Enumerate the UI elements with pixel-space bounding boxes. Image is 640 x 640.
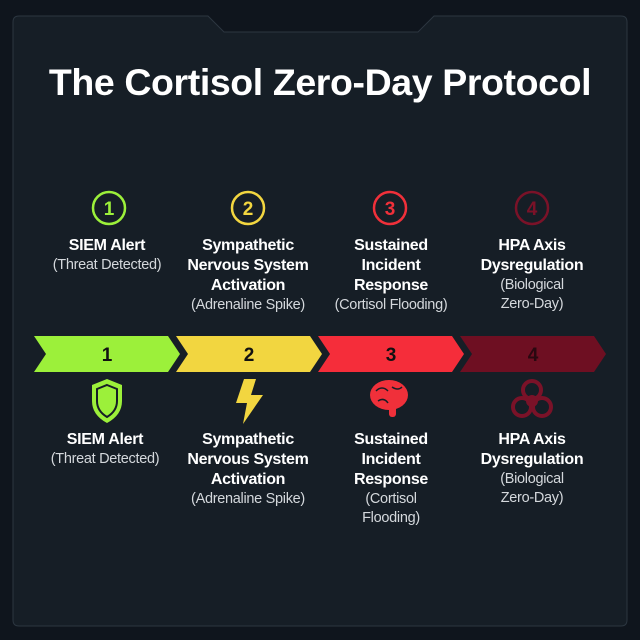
circle 1: 1 xyxy=(104,199,115,220)
lower label 4: Dysregulation xyxy=(481,451,583,468)
lower label 2: Nervous System xyxy=(187,451,309,468)
lower label 3: Flooding) xyxy=(362,510,420,526)
upper label 2: Sympathetic xyxy=(202,237,294,254)
icon: biohazard xyxy=(513,381,551,416)
icon: lightning xyxy=(236,379,263,424)
upper label 3: Incident xyxy=(362,257,420,274)
lower label 1 xyxy=(51,431,159,467)
icon: shield xyxy=(92,379,122,423)
circle 3 xyxy=(374,192,406,224)
upper label 2 xyxy=(187,237,309,313)
lower label 3: (Cortisol xyxy=(365,491,417,507)
icon: brain xyxy=(370,380,408,417)
icons xyxy=(92,379,553,424)
lower label 4: Zero-Day) xyxy=(501,490,563,506)
upper label 4: Zero-Day) xyxy=(501,296,563,312)
upper label 3 xyxy=(335,237,447,313)
lower label 2: Activation xyxy=(211,471,285,488)
circle 1 xyxy=(93,192,125,224)
chevron 2: 2 xyxy=(244,345,254,366)
lower label 1: (Threat Detected) xyxy=(51,451,159,467)
lower label 3: Sustained xyxy=(354,431,428,448)
lower label 2: Sympathetic xyxy=(202,431,294,448)
upper label 2: (Adrenaline Spike) xyxy=(191,297,305,313)
lower label 3: Response xyxy=(354,471,428,488)
chevron 2 xyxy=(176,336,322,372)
chevron 3 xyxy=(318,336,464,372)
upper label 1 xyxy=(53,237,161,273)
upper label 2: Activation xyxy=(211,277,285,294)
title: The Cortisol Zero-Day Protocol xyxy=(49,61,591,103)
upper label 4 xyxy=(481,237,583,312)
upper label 4: Dysregulation xyxy=(481,257,583,274)
lower label 4: HPA Axis xyxy=(498,431,566,448)
lower label 1: SIEM Alert xyxy=(67,431,143,448)
chevron 4: 4 xyxy=(528,345,539,366)
lower label 4: (Biological xyxy=(500,471,564,487)
lower label 2 xyxy=(187,431,309,507)
lower label 4 xyxy=(481,431,583,506)
lower label 3 xyxy=(354,431,428,526)
chevron 1: 1 xyxy=(102,345,113,366)
upper label 2: Nervous System xyxy=(187,257,309,274)
upper label 1: SIEM Alert xyxy=(69,237,145,254)
lower label 2: (Adrenaline Spike) xyxy=(191,491,305,507)
circle 4 xyxy=(516,192,548,224)
circle 3: 3 xyxy=(385,199,395,220)
lower label 3: Incident xyxy=(362,451,420,468)
upper label 3: (Cortisol Flooding) xyxy=(335,297,447,313)
circle 4: 4 xyxy=(527,199,538,220)
upper label 1: (Threat Detected) xyxy=(53,257,161,273)
chevron bar xyxy=(34,336,606,372)
upper label 4: HPA Axis xyxy=(498,237,566,254)
upper label 4: (Biological xyxy=(500,277,564,293)
upper label 3: Sustained xyxy=(354,237,428,254)
chevron 3: 3 xyxy=(386,345,396,366)
chevron 4 xyxy=(460,336,606,372)
chevron 1 xyxy=(34,336,180,372)
circle 2 xyxy=(232,192,264,224)
upper label 3: Response xyxy=(354,277,428,294)
circle 2: 2 xyxy=(243,199,253,220)
timeline with numbered circles xyxy=(92,190,550,226)
